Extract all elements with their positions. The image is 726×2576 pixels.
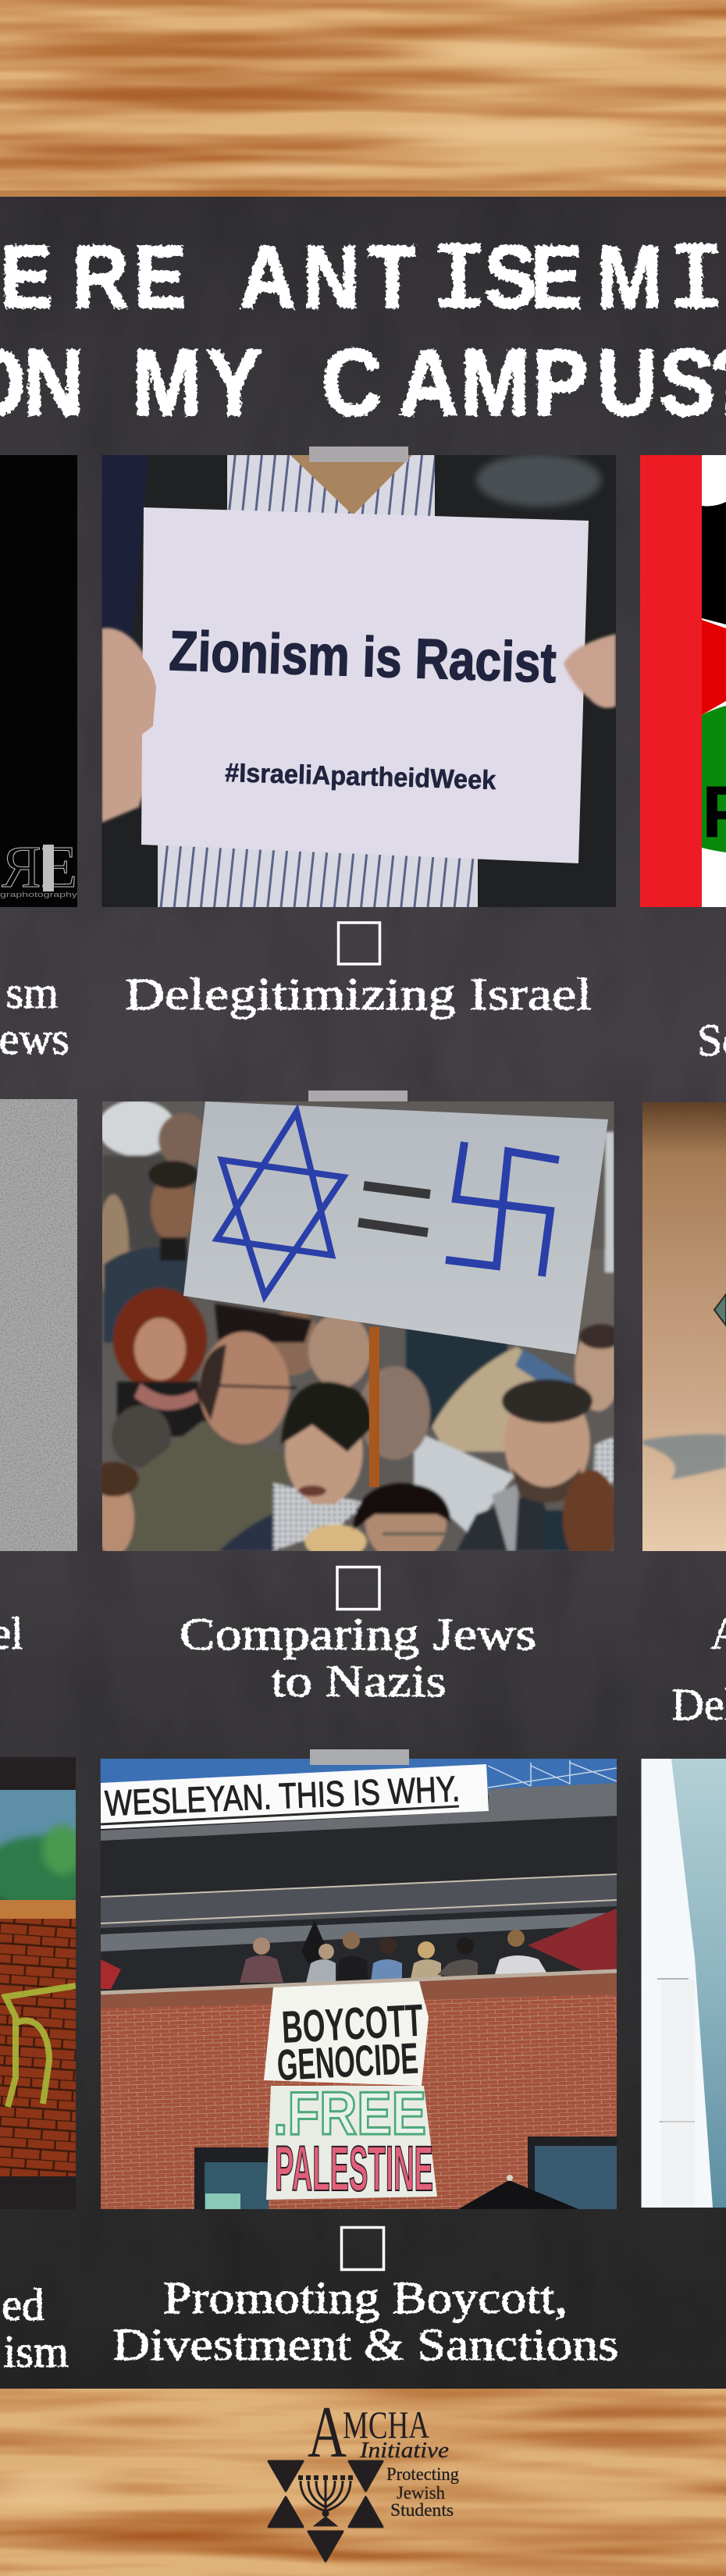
logo tagline: Protecting: [386, 2464, 459, 2484]
left fingers: [142, 657, 156, 735]
photo: Wesleyan balcony protest: GENOCIDE: [276, 2033, 419, 2090]
label: Promoting Boycott, Divestment & Sanctions: Promoting Boycott,: [163, 2272, 568, 2323]
logo tagline: Jewish: [397, 2483, 445, 2503]
brick wall: [101, 1973, 617, 2209]
young man: [219, 1510, 281, 1551]
sign board: [183, 1101, 608, 1354]
label: Promoting Boycott, Divestment & Sanctions: Divestment & Sanctions: [112, 2319, 618, 2370]
red umbrella right: [528, 1909, 617, 1971]
photo: right column row 3, curtain: [641, 1759, 726, 2208]
windows: [194, 2147, 269, 2209]
equals sign: [358, 1186, 430, 1233]
lattice: [488, 1760, 617, 1788]
blue coat right: [406, 1327, 507, 1429]
neck: [290, 455, 412, 515]
tape: row 3: [310, 1749, 409, 1765]
label: Comparing Jews to Nazis: [180, 1609, 536, 1706]
logo tagline: Students: [390, 2500, 454, 2520]
wood frame: top: [0, 0, 726, 197]
logo wordmark: Initiative: [359, 2439, 449, 2463]
photo: right column row 1, flag poster: [640, 455, 726, 907]
hanging banner: [264, 1981, 429, 2086]
label: left column row 1 (cropped): ews: [0, 1013, 69, 1064]
behind bald head: [358, 1366, 430, 1460]
brown hair: [563, 1470, 619, 1567]
logo star triangles: [269, 2461, 383, 2561]
banner painted words: BOYCOTT: [280, 1995, 424, 2053]
tan coat: [432, 1347, 568, 1452]
bottom man with glasses: [304, 1525, 367, 1559]
checkbox: row 2: [337, 1567, 379, 1610]
terrace: [101, 1875, 617, 1928]
bald man with glasses: [199, 1332, 290, 1444]
hooked cross drawn on the sign: [446, 1142, 559, 1276]
label: Comparing Jews to Nazis: Comparing Jews: [180, 1609, 536, 1660]
left hand: [101, 626, 143, 824]
railings: [101, 1874, 617, 1923]
label: Promoting Boycott, Divestment & Sanctions: [112, 2272, 618, 2370]
small head: [112, 1405, 171, 1468]
photo: right column row 2, tattoo skin: [642, 1102, 726, 1551]
students: [240, 1930, 550, 1983]
left bottom man: [94, 1481, 134, 1556]
label: left column row 1 (cropped): [0, 967, 69, 1064]
logo: AMCHA Initiative: [269, 2392, 459, 2561]
right-edge man: [575, 1327, 621, 1411]
background men: [265, 1310, 321, 1375]
logo wordmark: A: [308, 2392, 347, 2473]
man behind left: [104, 1247, 187, 1343]
logo tagline: [386, 2464, 459, 2520]
paper sign: [141, 507, 589, 863]
photo: Zionism is Racist sign: [101, 454, 617, 907]
tape: row 2: [308, 1091, 407, 1101]
navy jacket: [101, 455, 148, 640]
white shirt: [414, 1430, 515, 1534]
black dome: [458, 2180, 578, 2209]
logo wordmark: MCHA: [343, 2403, 429, 2446]
checkbox: row 3: [342, 2228, 384, 2270]
photo: crowd with sign: [89, 1100, 623, 1567]
red umbrella left: [101, 1959, 121, 1989]
banner text: WESLEYAN. THIS IS WHY.: [104, 1768, 461, 1823]
photo: left column row 2, grey texture: [0, 1099, 77, 1551]
jacket highlight: [476, 454, 601, 507]
logo wordmark: [308, 2392, 449, 2473]
olive jacket: [129, 1421, 293, 1551]
photo: Wesleyan balcony protest: PALESTINE: [275, 2133, 433, 2204]
sign hashtag: #IsraeliApartheidWeek: [225, 758, 496, 795]
black umbrella: [301, 1920, 328, 1967]
label: Comparing Jews to Nazis: to Nazis: [271, 1656, 447, 1706]
label: right column row 2 (cropped): [671, 1608, 726, 1730]
right fingers: [564, 634, 616, 708]
photo: left column row 1, black poster: graphotography: [0, 891, 78, 898]
label: Delegitimizing Israel: Delegitimizing Israel: [125, 969, 592, 1019]
wood frame: bottom: [0, 2389, 726, 2576]
label: left column row 1 (cropped): sm: [5, 967, 59, 1018]
shirt bottom: [158, 843, 478, 907]
photo: left column row 1, black poster: [0, 455, 78, 907]
photo: left column row 3, brick wall graffiti: [0, 1757, 98, 2209]
photo: Wesleyan balcony protest: .FREE: [273, 2079, 426, 2147]
shirt top: [227, 455, 435, 517]
photo: left column row 1, black poster: ЯE: [2, 834, 77, 900]
logo menorah: [298, 2478, 353, 2526]
grey cladding: [101, 1783, 617, 1841]
checkbox: row 1: [339, 923, 379, 964]
label: left column row 3 (cropped): ed: [2, 2279, 44, 2330]
star of david: [217, 1112, 343, 1296]
title: [0, 227, 726, 436]
sign headline: Zionism is Racist: [168, 620, 557, 695]
top banner: [101, 1764, 489, 1829]
photo: Wesleyan balcony protest: [100, 1759, 617, 2209]
sign pole: [369, 1327, 379, 1487]
balcony rail: [101, 1971, 617, 1993]
red-haired woman: [113, 1288, 207, 1391]
tape: row 1: [309, 447, 408, 462]
label: left column row 3 (cropped): ism: [3, 2326, 69, 2377]
label: left column row 3 (cropped): [2, 2279, 69, 2377]
right young man: [457, 1491, 562, 1551]
